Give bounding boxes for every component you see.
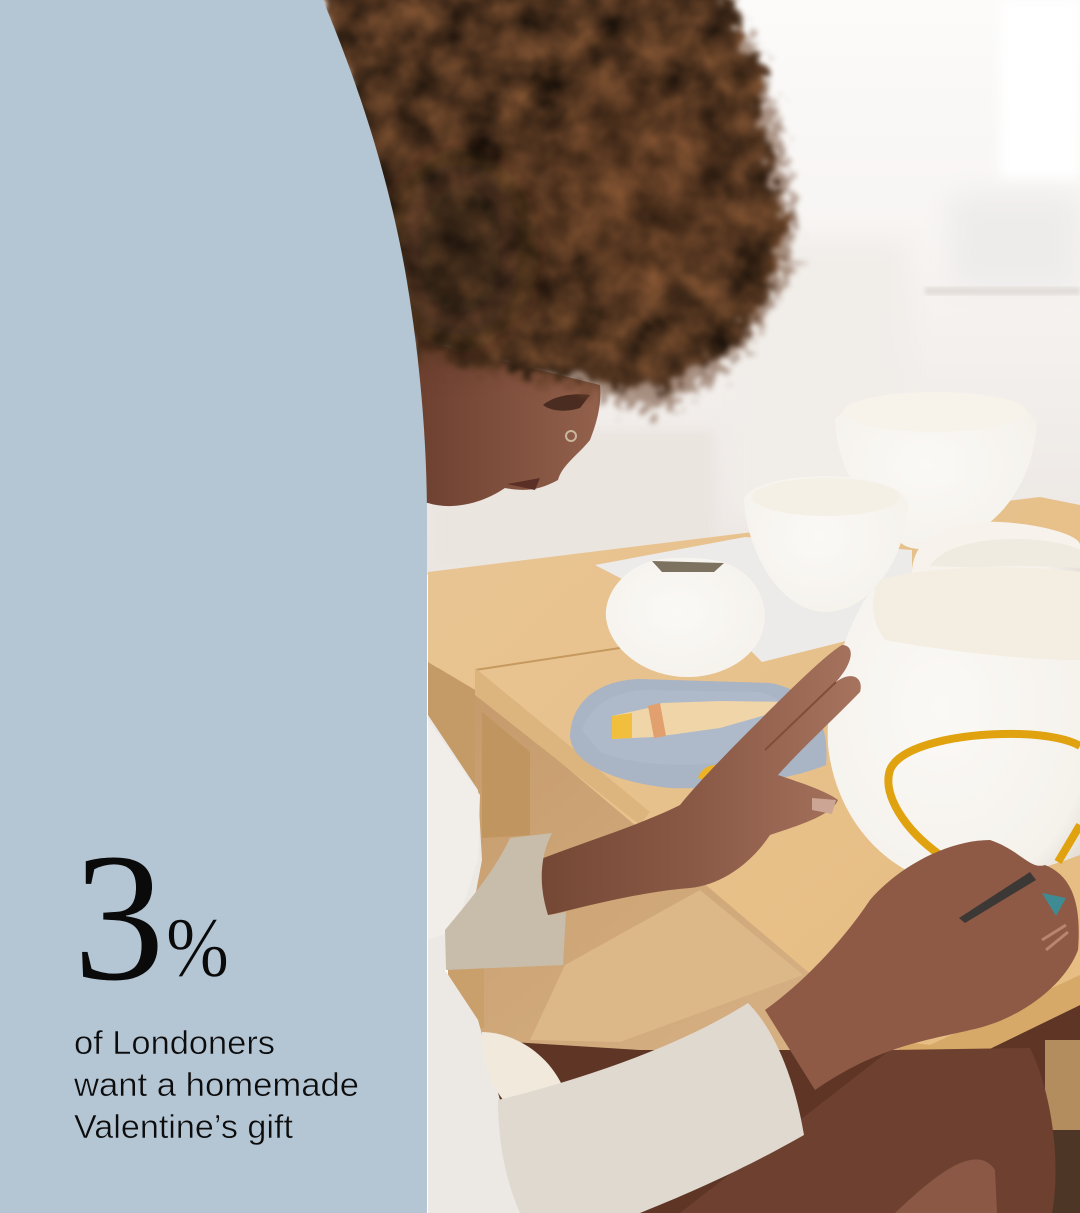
bowl: small round pot <box>606 558 765 677</box>
long beige sleeve <box>498 1003 804 1213</box>
dark floor and legs behind the table <box>428 1000 1080 1213</box>
afro hair <box>325 0 792 410</box>
bowl: middle <box>744 476 908 612</box>
caption text <box>73 1024 359 1145</box>
right forearm and hand <box>765 840 1079 1090</box>
face <box>418 340 600 506</box>
drawers under the table <box>428 665 900 1050</box>
paper sheet <box>595 537 912 662</box>
left forearm and hand <box>538 645 861 918</box>
caption text: want a homemade <box>73 1066 359 1103</box>
leg <box>680 1048 1056 1213</box>
beige cuff <box>445 833 566 970</box>
paint brush <box>612 701 795 739</box>
large white bowl with yellow ring <box>828 566 1080 881</box>
photo: woman painting ceramic bowls <box>320 0 1080 1213</box>
blue curved panel <box>0 0 427 1213</box>
grey plate <box>570 679 827 788</box>
white shirt and shorts <box>428 715 562 1213</box>
statistic: 3%: 3 <box>73 815 165 1019</box>
wooden table <box>428 497 1080 1078</box>
bowl: back right <box>835 392 1037 549</box>
caption text: of Londoners <box>74 1024 275 1061</box>
caption text: Valentine’s gift <box>74 1108 293 1145</box>
statistic: 3% <box>73 815 229 1019</box>
curtain and wall backdrop <box>320 0 1080 575</box>
bowl: right rear <box>912 522 1080 580</box>
statistic: 3%: % <box>166 901 229 995</box>
